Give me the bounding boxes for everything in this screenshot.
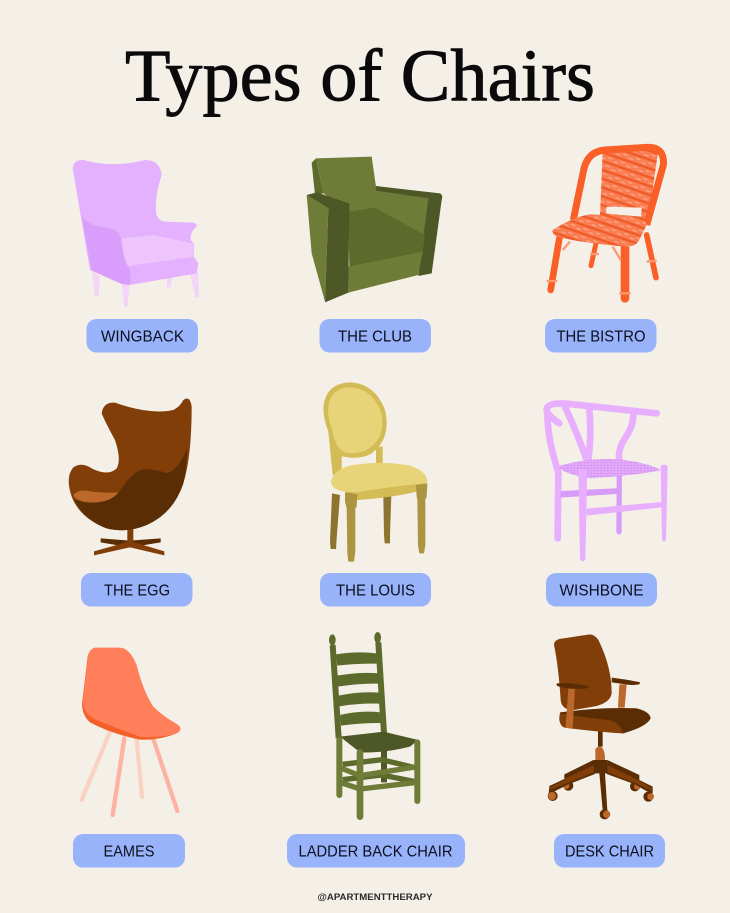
chair: wingback <box>73 160 199 307</box>
label: the egg <box>81 573 192 606</box>
label: the club <box>320 319 431 352</box>
label: desk chair <box>554 834 665 868</box>
label: the egg: THE EGG <box>104 582 170 600</box>
label: the club: THE CLUB <box>338 328 412 346</box>
chair: eames <box>82 648 180 815</box>
label: wishbone <box>546 573 657 606</box>
label: wingback <box>86 319 198 352</box>
chair: the louis <box>323 382 427 562</box>
label: the bistro <box>545 319 656 352</box>
title: Types of Chairs <box>125 36 595 118</box>
chair: the club <box>307 157 442 302</box>
label: wishbone: WISHBONE <box>560 582 644 600</box>
label: desk chair: DESK CHAIR <box>565 844 654 860</box>
label: the bistro: THE BISTRO <box>556 328 646 346</box>
label: eames <box>73 834 185 868</box>
chair: the bistro <box>547 147 663 298</box>
chair: ladder back chair <box>329 632 418 817</box>
label: ladder back chair <box>287 834 465 868</box>
label: ladder back chair: LADDER BACK CHAIR <box>298 844 452 860</box>
chair: wishbone <box>547 403 668 561</box>
chair: desk chair <box>548 634 654 819</box>
footer handle: @APARTMENTTHERAPY <box>318 892 433 903</box>
label: eames: EAMES <box>104 844 154 860</box>
label: the louis <box>320 573 431 606</box>
label: wingback: WINGBACK <box>101 328 185 346</box>
label: the louis: THE LOUIS <box>336 582 415 600</box>
chair: the egg <box>69 398 192 555</box>
